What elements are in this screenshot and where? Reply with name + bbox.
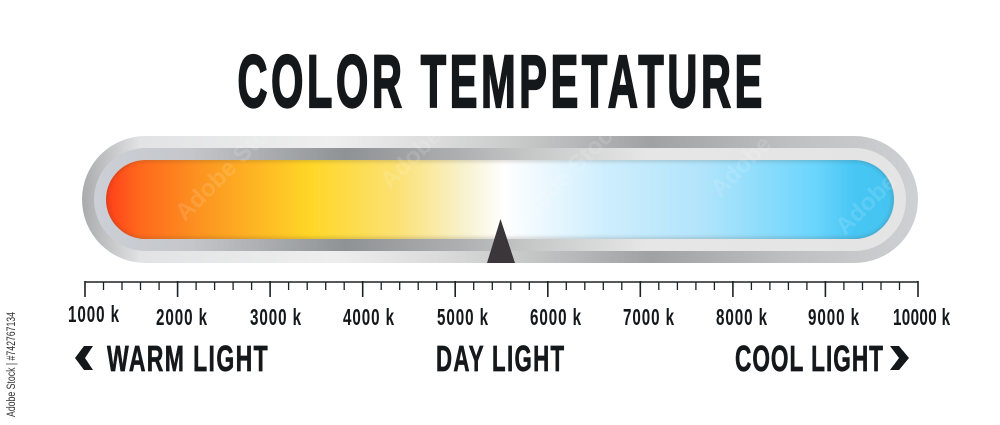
gauge outer frame xyxy=(82,136,918,263)
faint stock watermarks: Adobe Stock xyxy=(170,103,293,226)
scale labels xyxy=(68,302,950,331)
scale labels: 4000 k xyxy=(343,305,394,331)
stock id side text: Adobe Stock | #742767134 xyxy=(6,312,18,417)
faint stock watermarks: Adobe Stock xyxy=(505,113,628,236)
colour spectrum bar xyxy=(106,160,894,239)
icon: right chevron xyxy=(890,346,909,370)
scale labels: 8000 k xyxy=(716,305,767,331)
day light label: DAY LIGHT xyxy=(436,340,564,379)
scale labels: 9000 k xyxy=(808,305,859,331)
scale labels: 10000 k xyxy=(893,305,950,331)
temperature ruler xyxy=(85,281,918,297)
gauge middle ring xyxy=(94,148,906,251)
icon: left chevron xyxy=(75,346,93,370)
scale labels: 2000 k xyxy=(156,305,207,331)
cool light label: COOL LIGHT xyxy=(735,340,883,379)
faint stock watermarks: Adobe xyxy=(705,130,777,202)
pointer triangle xyxy=(487,219,515,263)
scale labels: 7000 k xyxy=(623,305,674,331)
temperature gauge xyxy=(82,136,918,263)
faint stock watermarks: Adobe xyxy=(830,168,902,240)
scale labels: 1000 k xyxy=(68,302,119,328)
scale labels: 3000 k xyxy=(250,305,301,331)
scale labels: 6000 k xyxy=(530,305,581,331)
faint stock watermarks xyxy=(170,103,902,240)
title: COLOR TEMPETATURE xyxy=(238,40,762,123)
warm light label: WARM LIGHT xyxy=(107,339,268,379)
scale labels: 5000 k xyxy=(437,305,488,331)
faint stock watermarks: Adobe xyxy=(375,122,447,194)
